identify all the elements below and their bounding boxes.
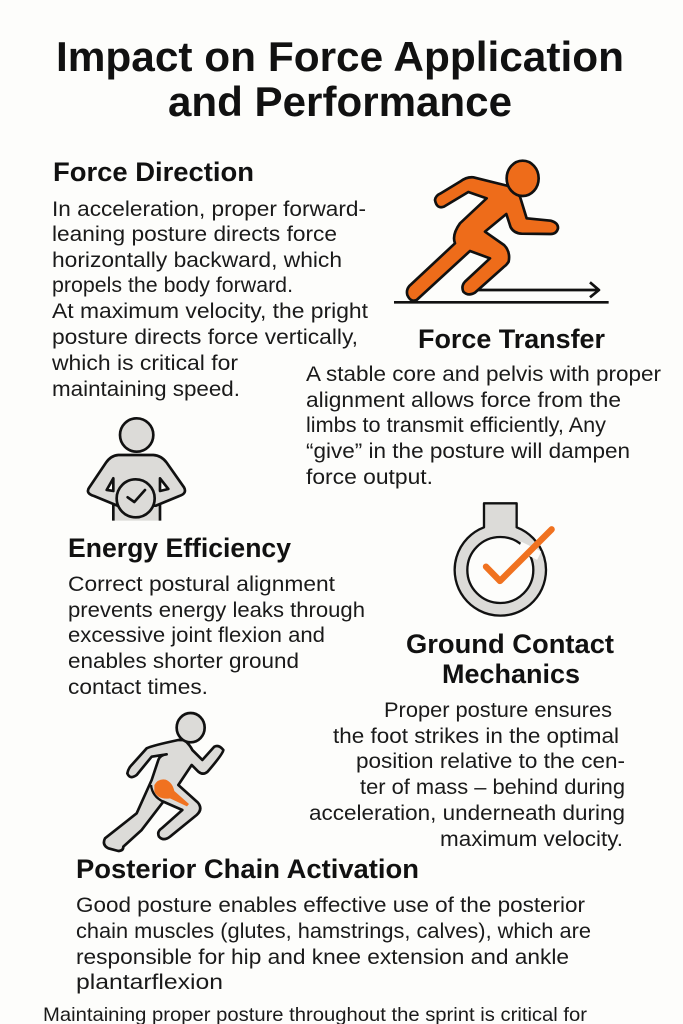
text: energy efficiency body: excessive joint flexion and [68, 624, 325, 647]
text: force direction body: which is critical for [51, 352, 238, 375]
text: ground contact body: the foot strikes in the optimal [333, 725, 619, 748]
text: ground contact body [309, 699, 625, 851]
icon: stopwatch with orange check [455, 503, 552, 616]
text: force direction body: propels the body forward. [52, 274, 293, 297]
text: posterior chain body [76, 894, 591, 994]
text: ground contact body: ter of mass – behind during [360, 776, 625, 799]
text: force transfer body: alignment allows force from the [306, 389, 621, 412]
text: ground contact body: acceleration, underneath during [309, 802, 625, 825]
icon: person holding checkmark core [88, 418, 185, 521]
text: energy efficiency body: prevents energy leaks through [68, 599, 365, 622]
panel: force transfer [306, 324, 661, 489]
heading: ground contact mechanics: Ground Contact [406, 629, 614, 659]
text: energy efficiency body [68, 573, 365, 699]
text: force transfer body: “give” in the posture will dampen [306, 440, 630, 463]
panel: ground contact mechanics [309, 629, 625, 851]
heading: force direction: Force Direction [53, 157, 254, 187]
text: force transfer body: A stable core and pelvis with proper [306, 363, 661, 386]
heading: force transfer: Force Transfer [418, 324, 605, 354]
icon: orange sprinter with arrow [394, 161, 609, 302]
text: energy efficiency body: enables shorter ground [68, 650, 299, 673]
title: Impact on Force Application [56, 33, 624, 80]
text: ground contact body: position relative to the cen- [356, 750, 625, 773]
icon: runner with orange glute highlight [104, 713, 223, 851]
text: force direction body: At maximum velocity, the pright [52, 300, 368, 323]
panel: force direction [51, 157, 368, 401]
text: force direction body: In acceleration, proper forward- [52, 198, 366, 221]
text: ground contact body: maximum velocity. [440, 828, 623, 851]
text: force direction body: maintaining speed. [52, 378, 240, 401]
text: force direction body: posture directs force vertically, [52, 326, 358, 349]
text: posterior chain body: responsible for hip and knee extension and ankle [76, 946, 569, 969]
heading: posterior chain activation: Posterior Chain Activation [76, 854, 419, 884]
text: energy efficiency body: Correct postural alignment [68, 573, 335, 596]
text: posterior chain body: Good posture enables effective use of the posterior [76, 894, 585, 917]
text: force transfer body [306, 363, 661, 489]
text: force transfer body: force output. [306, 466, 433, 489]
heading: energy efficiency: Energy Efficiency [68, 533, 291, 563]
text: ground contact body: Proper posture ensures [384, 699, 612, 722]
heading: ground contact mechanics [406, 629, 614, 689]
title [56, 33, 624, 125]
text: force direction body: leaning posture directs force [52, 223, 337, 246]
text: force transfer body: limbs to transmit efficiently, Any [306, 414, 607, 437]
text: posterior chain body: chain muscles (glutes, hamstrings, calves), which are [76, 920, 591, 943]
text: posterior chain body: plantarflexion [76, 971, 223, 994]
text: energy efficiency body: contact times. [68, 676, 208, 699]
title: and Performance [168, 78, 512, 125]
panel: energy efficiency [68, 533, 365, 699]
panel: posterior chain activation [76, 854, 591, 994]
heading: ground contact mechanics: Mechanics [442, 659, 580, 689]
text: force direction body [51, 198, 368, 401]
text: force direction body: horizontally backward, which [52, 249, 342, 272]
